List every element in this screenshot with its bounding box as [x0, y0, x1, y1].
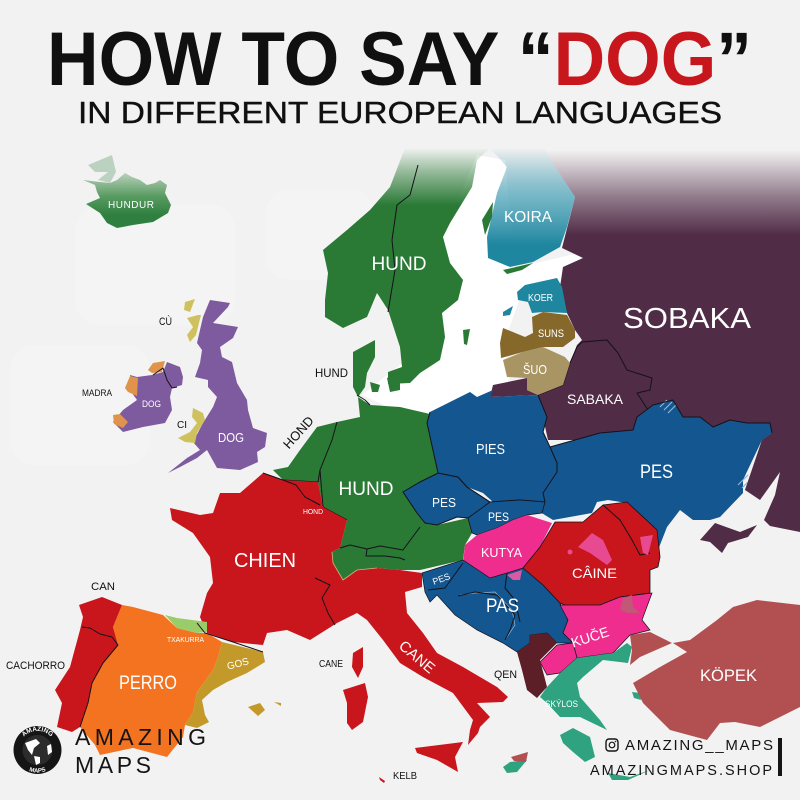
region: Iceland fjords — [88, 155, 116, 183]
region: Iceland — [83, 173, 171, 228]
label: CHIEN: CHIEN — [234, 550, 296, 572]
Poland east border — [538, 395, 772, 447]
label: HUND Denmark: HUND — [315, 366, 348, 380]
region: Crete — [608, 770, 650, 780]
logo text: Maps: MAPS — [75, 752, 151, 778]
Portugal-Spain border — [80, 637, 118, 727]
region: former Yugoslavia — [422, 560, 573, 652]
region: Slovakia — [468, 500, 545, 535]
label: PAS: PAS — [486, 596, 519, 617]
France-Italy border — [315, 578, 335, 625]
region: Cyprus — [503, 760, 527, 773]
region: Ireland — [113, 362, 183, 432]
label: PES Slovakia: PES — [488, 510, 509, 524]
region: Romania and Moldova — [523, 502, 660, 607]
label: DOG Britain: DOG — [218, 430, 244, 445]
Bosnia border — [458, 592, 515, 640]
label: PES Ukraine: PES — [640, 462, 673, 483]
Switzerland south border — [366, 549, 405, 560]
label: KELB: KELB — [393, 771, 417, 782]
Northern Ireland border — [153, 368, 177, 388]
label: CÙ: CÙ — [159, 315, 172, 328]
Slovenia border — [428, 563, 463, 590]
Portugal-Galicia border — [82, 627, 112, 637]
Benelux borders — [283, 470, 320, 482]
label: KOER: KOER — [528, 292, 553, 304]
region: Gagauzia — [640, 535, 653, 555]
region: Hungarian-speaking Transylvania — [578, 533, 612, 565]
region: Irish-speaking Donegal — [148, 361, 165, 373]
German-speaking borders — [320, 422, 347, 520]
label: SOBAKA: SOBAKA — [623, 303, 752, 335]
label: HOND Netherlands: HOND — [280, 413, 317, 452]
label: HUNDUR: HUNDUR — [108, 200, 154, 211]
label: CÂINE: CÂINE — [572, 565, 617, 581]
region: North Macedonia — [540, 643, 577, 675]
divider bar — [778, 738, 782, 776]
Switzerland outline — [332, 552, 377, 580]
label: KUTYA: KUTYA — [481, 545, 522, 560]
region: Menorca — [274, 702, 281, 706]
map of Europe — [55, 130, 800, 783]
region: Donbas — [745, 433, 780, 495]
Alpine borders — [340, 527, 420, 550]
label: MADRA: MADRA — [82, 388, 113, 399]
region: Transylvania enclave — [568, 550, 572, 554]
region: Catalan-speaking — [185, 642, 265, 728]
label: QEN: QEN — [494, 669, 517, 681]
region: Denmark Zealand — [387, 372, 400, 392]
region: Hungary — [463, 515, 552, 578]
Baltic sea — [362, 155, 583, 420]
region: Crimea — [700, 523, 757, 553]
label: PES Czechia: PES — [432, 495, 456, 510]
region: Turkish-speaking Bulgaria — [620, 595, 640, 613]
region: Finland south coast — [503, 263, 533, 274]
label: KOIRA: KOIRA — [504, 209, 552, 226]
label: SUNS: SUNS — [538, 328, 564, 340]
label: PES Slovenia: PES — [431, 571, 452, 587]
region: Northern Cyprus — [511, 752, 528, 762]
label: GOS: GOS — [226, 656, 251, 673]
label: CANE Italy: CANE — [395, 637, 438, 677]
Poland west border — [427, 412, 545, 502]
region: Gotland — [463, 329, 470, 345]
region: Malta — [379, 777, 385, 783]
region: Belarus outline — [538, 340, 652, 410]
region: Denmark Funen — [370, 382, 380, 392]
Bosnia outline — [460, 592, 515, 640]
region: Swedish-speaking Finland — [482, 202, 493, 235]
label: CACHORRO: CACHORRO — [6, 660, 65, 672]
region: Germany, Benelux, Austria and Switzerland — [273, 397, 472, 580]
region: Sardinia — [343, 683, 368, 730]
hatch: Ukrainian minority areas — [660, 400, 756, 490]
region: Hebrides — [184, 299, 195, 312]
Norway-Sweden border — [388, 165, 418, 312]
label: PIES: PIES — [476, 441, 505, 458]
label: PERRO: PERRO — [119, 673, 177, 694]
region: Russia — [538, 130, 800, 532]
region: Lithuania — [503, 347, 570, 395]
region: Greece mainland — [540, 643, 632, 730]
region: Basque Country — [165, 615, 207, 633]
region: Balearic Islands — [248, 703, 265, 716]
region: Poland — [427, 390, 557, 502]
region: Albania and Kosovo — [517, 633, 557, 698]
region: Turkey — [633, 600, 800, 740]
label: HUND Germany: HUND — [338, 479, 394, 500]
Poland-Ukraine border — [543, 447, 557, 502]
label: KÖPEK: KÖPEK — [700, 666, 758, 685]
region: Finland — [487, 140, 575, 267]
instagram handle: AMAZING__MAPS — [625, 737, 773, 754]
region: Latvia — [500, 312, 575, 358]
region: Great Britain — [168, 300, 267, 473]
website: AMAZINGMAPS.SHOP — [590, 763, 772, 779]
logo: Amazing Maps globe: AMAZING — [22, 726, 53, 736]
Pyrenees border — [197, 623, 263, 652]
label: CI: CI — [177, 420, 187, 431]
label: HOND Belgium: HOND — [303, 507, 324, 516]
label: CANE Corsica: CANE — [319, 659, 343, 670]
label: KUČE: KUČE — [569, 623, 611, 651]
region: Estonia — [517, 278, 567, 313]
label: DOG Ireland: DOG — [142, 399, 161, 410]
region: Irish-speaking south — [113, 414, 128, 428]
region: Spain — [80, 605, 222, 757]
France-Germany border — [263, 473, 320, 505]
region: Kaliningrad — [490, 378, 538, 397]
region: Peloponnese — [560, 728, 595, 762]
region: Aegean islands — [632, 692, 641, 700]
logo: Amazing Maps globe: MAPS — [29, 767, 46, 773]
labels on map — [6, 200, 758, 782]
region: Vojvodina Hungarian — [507, 570, 522, 580]
label: CAN: CAN — [91, 581, 115, 593]
title: HOW TO SAY “DOG” — [47, 17, 752, 102]
region: France, Wallonia and Italy — [170, 473, 508, 745]
label: HUND Scandinavia: HUND — [372, 254, 426, 275]
region: Denmark Jutland — [353, 340, 375, 397]
Denmark border — [357, 395, 370, 405]
region: Irish-speaking west — [125, 376, 138, 396]
region: Wales — [178, 408, 205, 443]
logo text: Amazing Maps: AMAZING — [75, 724, 206, 750]
region: Czechia — [403, 473, 490, 525]
logo: Amazing Maps globe — [14, 726, 62, 774]
label: TXAKURRA: TXAKURRA — [167, 635, 204, 644]
region: Scandinavia — [323, 148, 490, 384]
region: Portugal and Galicia — [55, 597, 122, 732]
Moldova border — [603, 505, 650, 555]
region: Ukraine — [540, 400, 772, 550]
region: Bulgaria — [560, 593, 652, 658]
region: European Turkey — [630, 632, 672, 665]
subtitle: IN DIFFERENT EUROPEAN LANGUAGES — [78, 95, 722, 130]
label: SKÝLOS: SKÝLOS — [545, 699, 578, 709]
region: Estonian islands — [503, 306, 513, 316]
label: SABAKA: SABAKA — [567, 391, 624, 407]
icon: Instagram — [606, 739, 618, 751]
region: Corsica — [352, 647, 363, 678]
region: Scottish Gaelic — [187, 315, 201, 342]
label: ŠUO: ŠUO — [523, 362, 547, 377]
region: Sicily — [415, 742, 463, 772]
Serbia border — [505, 573, 520, 622]
